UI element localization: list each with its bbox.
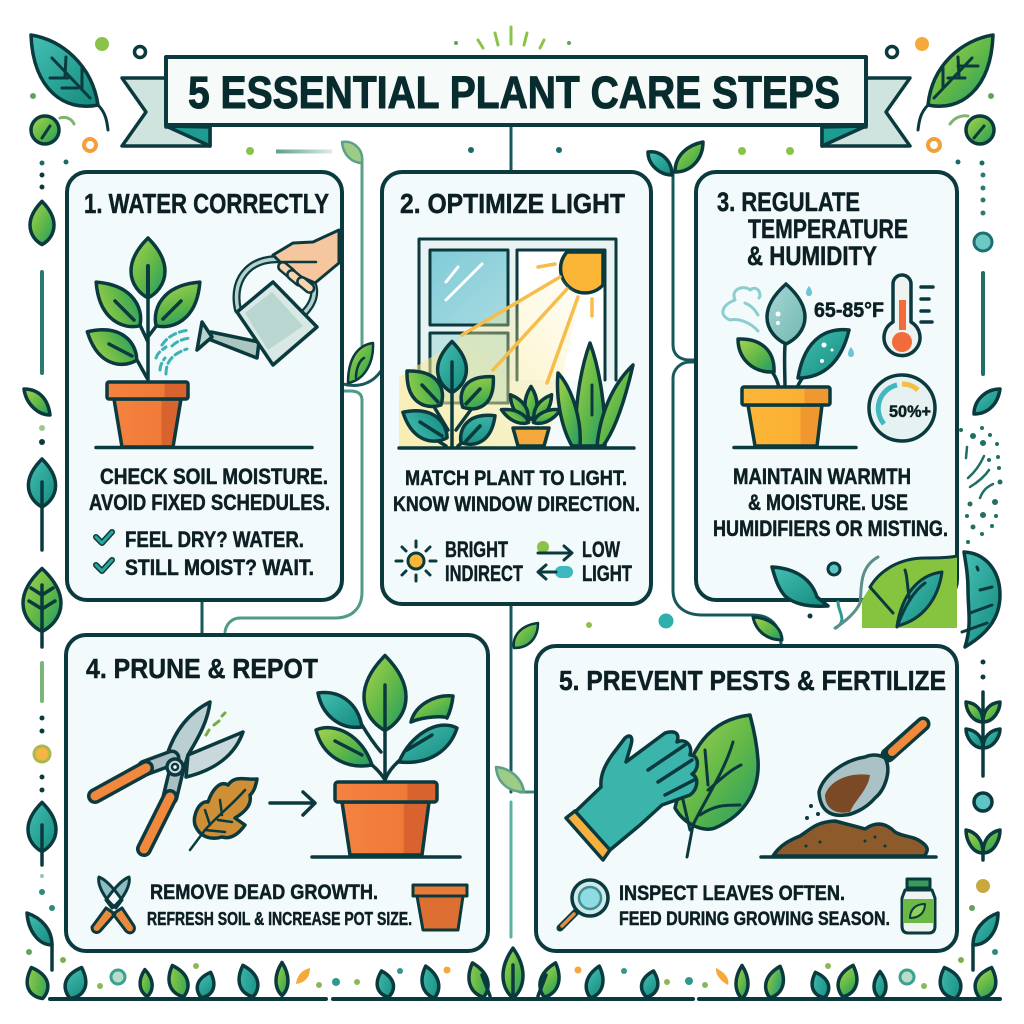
heading 5: 5. PREVENT PESTS & FERTILIZE [559, 665, 946, 696]
top right leaf cluster [886, 35, 994, 166]
window plants [396, 342, 634, 452]
bottom foliage border [22, 948, 1001, 1002]
humidity gauge: 50%+ [889, 402, 931, 421]
humidity gauge [869, 375, 935, 441]
body text 3: & MOISTURE. USE [748, 490, 908, 515]
panel 5: prevent pests and fertilize [536, 646, 957, 951]
repotted plant [312, 656, 460, 857]
steam icon [723, 288, 760, 331]
checklist: STILL MOIST? WAIT. [125, 555, 314, 580]
hand [273, 230, 339, 294]
body text 3: HUMIDIFIERS OR MISTING. [713, 516, 948, 541]
low light legend [537, 537, 632, 586]
sun [561, 252, 603, 293]
right edge vine decoration [958, 172, 1000, 970]
thermometer [884, 275, 933, 356]
body text 1: AVOID FIXED SCHEDULES. [89, 490, 330, 515]
heading 3: 3. REGULATE [717, 187, 860, 217]
heading 4: 4. PRUNE & REPOT [86, 653, 318, 684]
panel 1: water correctly [67, 172, 342, 600]
body text 2: MATCH PLANT TO LIGHT. [405, 467, 627, 490]
bright indirect legend [396, 537, 523, 586]
water droplets [156, 330, 190, 374]
panel 3: regulate temperature and humidity [696, 172, 957, 600]
pruning shears [95, 702, 243, 849]
humidity plant [734, 284, 856, 448]
title banner [122, 57, 910, 146]
bright indirect legend: BRIGHT [445, 537, 508, 562]
window [419, 239, 616, 403]
body text 1 [89, 464, 330, 515]
arrow [270, 792, 315, 815]
body text 3 [713, 464, 948, 541]
bright indirect legend: INDIRECT [445, 561, 523, 586]
heading 1: 1. WATER CORRECTLY [84, 188, 329, 219]
plant illustration [80, 238, 312, 448]
checklist: FEEL DRY? WATER. [125, 527, 304, 552]
heading 3: & HUMIDITY [747, 241, 877, 271]
body text 2 [393, 467, 640, 516]
body text 2: KNOW WINDOW DIRECTION. [393, 493, 640, 516]
left edge vine decoration [23, 172, 66, 970]
checklist [96, 527, 314, 580]
fertilizer scoop [805, 724, 923, 820]
overlapping foliage at panel 3 corner [753, 552, 1000, 647]
sun rays [462, 264, 592, 383]
small shears icon [92, 877, 134, 933]
top left leaf cluster [30, 35, 146, 166]
panel 2: optimize light [382, 172, 651, 604]
body text 5: FEED DURING GROWING SEASON. [619, 909, 890, 930]
connector vines between panels [202, 125, 781, 937]
heading 2: 2. OPTIMIZE LIGHT [400, 188, 625, 219]
low light legend: LOW [582, 537, 620, 562]
temperature label: 65-85°F [814, 299, 884, 322]
body text 4 [147, 881, 412, 929]
small empty pot [413, 885, 467, 930]
heading 3 [717, 187, 908, 271]
light beam [399, 277, 580, 447]
body text 5: INSPECT LEAVES OFTEN. [619, 882, 845, 905]
body text 1: CHECK SOIL MOISTURE. [100, 464, 328, 489]
magnifier [560, 880, 608, 928]
glove [566, 732, 697, 860]
fertilizer bottle [902, 879, 935, 933]
body text 4: REFRESH SOIL & INCREASE POT SIZE. [147, 909, 412, 929]
decorative dots and sprigs around vines [246, 142, 794, 792]
right dotted particle cluster [959, 426, 1002, 544]
heading 3: TEMPERATURE [748, 214, 908, 244]
top sprout rays [454, 27, 571, 48]
body text 4: REMOVE DEAD GROWTH. [150, 881, 378, 904]
low light legend: LIGHT [582, 561, 632, 586]
title banner: 5 ESSENTIAL PLANT CARE STEPS [188, 67, 840, 118]
leaf being inspected [675, 715, 758, 857]
body text 3: MAINTAIN WARMTH [733, 464, 911, 489]
soil mound [761, 821, 936, 857]
watering can [197, 259, 317, 365]
dead leaf [190, 779, 257, 850]
panel 4: prune and repot [66, 635, 488, 951]
body text 5 [619, 882, 890, 930]
